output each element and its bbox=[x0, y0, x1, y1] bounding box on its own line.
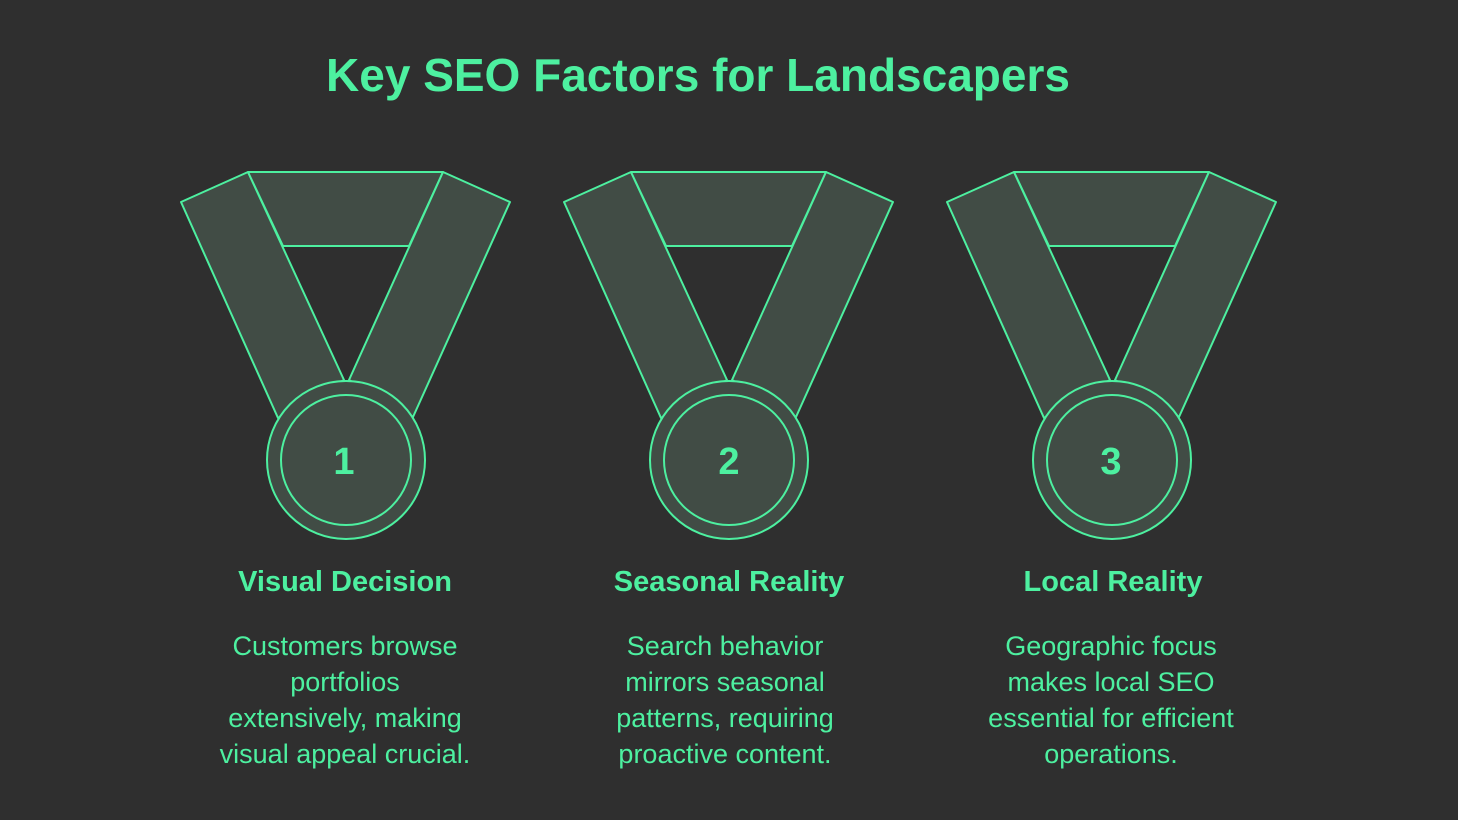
text 1: extensively, making bbox=[228, 703, 462, 733]
medal 1 bbox=[181, 172, 510, 539]
text 1 bbox=[220, 631, 470, 769]
heading 3: Local Reality bbox=[1024, 566, 1202, 598]
text 3: operations. bbox=[1044, 739, 1178, 769]
text 2 bbox=[616, 631, 834, 769]
title: Key SEO Factors for Landscapers bbox=[326, 49, 1070, 101]
text 2: mirrors seasonal bbox=[625, 667, 825, 697]
text 3: essential for efficient bbox=[988, 703, 1234, 733]
text 1: visual appeal crucial. bbox=[220, 739, 470, 769]
text 3 bbox=[988, 631, 1234, 769]
text 2: proactive content. bbox=[618, 739, 832, 769]
heading 1: Visual Decision bbox=[238, 566, 452, 598]
medal 3 bbox=[947, 172, 1276, 539]
text 2: patterns, requiring bbox=[616, 703, 834, 733]
text 1: portfolios bbox=[290, 667, 400, 697]
medal 1: 1 bbox=[333, 441, 355, 483]
text 1: Customers browse bbox=[232, 631, 458, 661]
medal 3: 3 bbox=[1100, 441, 1122, 483]
medal 2: 2 bbox=[718, 441, 740, 483]
text 3: makes local SEO bbox=[1007, 667, 1215, 697]
text 2: Search behavior bbox=[627, 631, 823, 661]
heading 2: Seasonal Reality bbox=[614, 566, 844, 598]
medal 2 bbox=[564, 172, 893, 539]
text 3: Geographic focus bbox=[1005, 631, 1217, 661]
